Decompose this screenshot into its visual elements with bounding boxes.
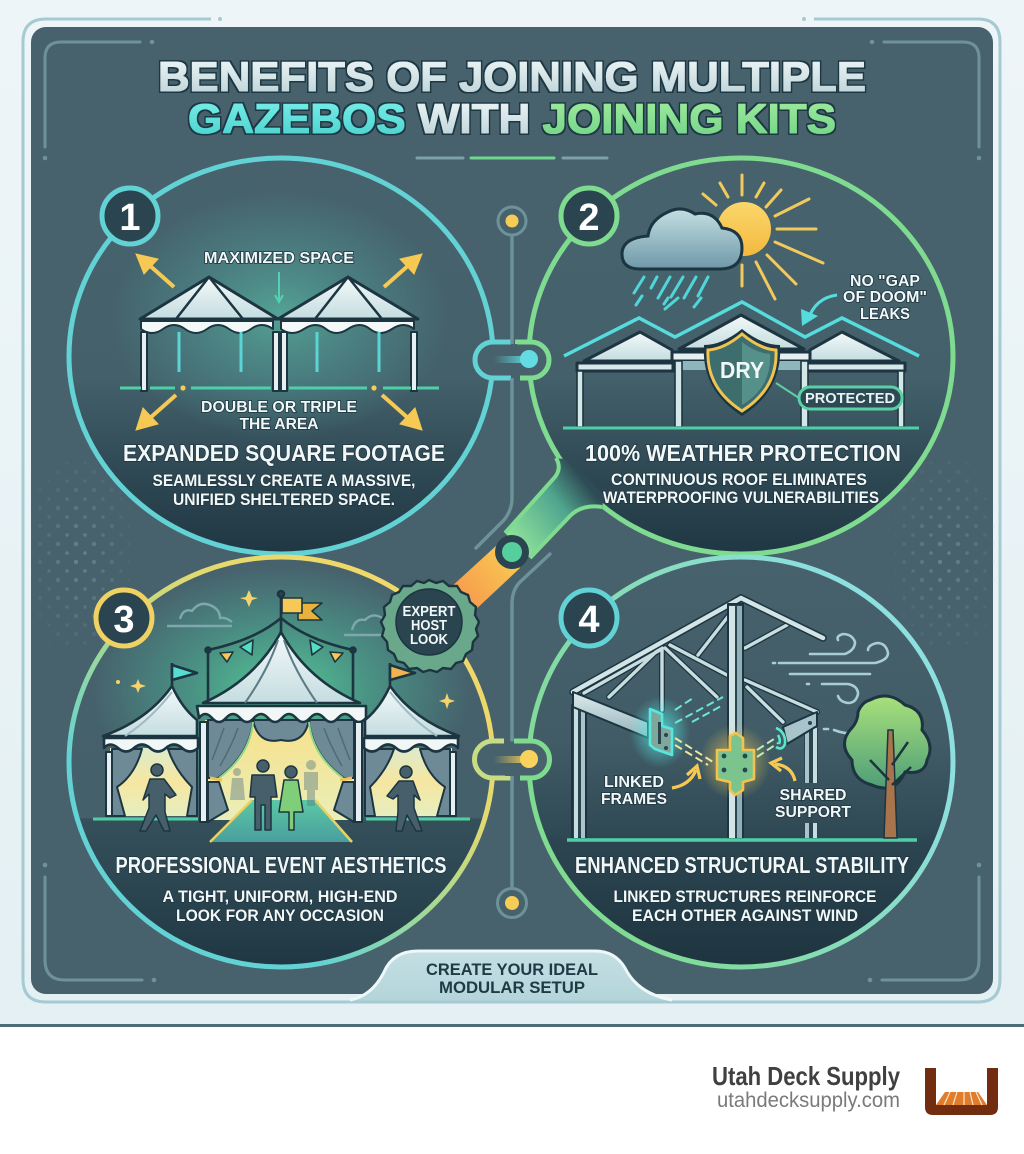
call to action tab: CREATE YOUR IDEAL	[426, 961, 598, 979]
panel 1: expanded square footage	[69, 158, 493, 554]
ground	[93, 818, 470, 820]
footer band	[0, 1024, 1024, 1154]
footer brand text: Utah Deck Supply	[712, 1061, 900, 1091]
connector capsule lower	[474, 736, 550, 782]
label: linked frames	[601, 774, 667, 808]
callout: protected: PROTECTED	[805, 391, 895, 407]
panel 4: structural stability	[529, 557, 953, 967]
call to action tab	[350, 951, 672, 1000]
badge 1	[102, 188, 158, 244]
badge 4: 4	[578, 599, 600, 641]
arrow: down to joint	[275, 272, 283, 302]
badge 2	[561, 188, 617, 244]
right post	[804, 728, 818, 838]
description 3: A TIGHT, UNIFORM, HIGH-END	[162, 888, 398, 906]
footer brand text	[712, 1061, 900, 1112]
connector node bottom	[498, 888, 526, 918]
description 1: SEAMLESSLY CREATE A MASSIVE,	[152, 472, 416, 490]
title: BENEFITS OF JOINING MULTIPLE	[158, 53, 866, 100]
left post	[572, 705, 586, 838]
left tent	[103, 663, 198, 816]
connector capsule upper	[475, 340, 549, 382]
icon: sun	[703, 175, 823, 299]
connector node top	[498, 207, 526, 235]
badge 4	[561, 590, 617, 646]
panel 2: weather protection	[529, 158, 953, 554]
yellow expansion arrows	[136, 254, 422, 430]
badge: expert host look: LOOK	[410, 632, 448, 648]
pennants	[220, 640, 343, 662]
description 1	[152, 472, 416, 509]
connector dashes	[675, 697, 778, 765]
continuous cyan roofline	[564, 302, 919, 356]
label: shared support	[775, 787, 852, 821]
badge 1: 1	[119, 197, 141, 239]
clouds and sparkles	[116, 590, 455, 709]
icon: tree	[844, 696, 930, 838]
call to action tab: MODULAR SETUP	[439, 979, 585, 997]
icon: shared support bracket	[717, 733, 754, 795]
cyan curtain rails	[179, 332, 379, 372]
ground line	[563, 426, 919, 430]
badge 3: 3	[113, 599, 135, 641]
label: shared support: SHARED	[780, 787, 846, 804]
center tent	[197, 591, 366, 822]
icon: wind	[773, 634, 888, 734]
badge: expert host look: HOST	[411, 618, 447, 634]
panel 3: professional event aesthetics	[69, 557, 493, 967]
title	[158, 53, 866, 142]
badge 3	[96, 590, 152, 646]
label: maximized space: MAXIMIZED SPACE	[204, 250, 354, 267]
main panel	[31, 27, 993, 994]
heading 2: 100% WEATHER PROTECTION	[585, 440, 901, 466]
diagonal joint band	[450, 458, 604, 613]
footer logo	[925, 1068, 998, 1115]
label: shared support: SUPPORT	[775, 804, 852, 821]
description 3: LOOK FOR ANY OCCASION	[176, 907, 384, 925]
heading 1: EXPANDED SQUARE FOOTAGE	[123, 440, 445, 466]
callout: no gap of doom leaks	[801, 273, 927, 326]
description 3	[162, 888, 398, 925]
heading 4: ENHANCED STRUCTURAL STABILITY	[575, 852, 909, 878]
center pole	[728, 604, 743, 838]
ground line	[567, 838, 917, 842]
curtains	[208, 720, 253, 778]
icon: shield DRY	[704, 329, 780, 416]
icon: rain cloud	[622, 209, 742, 309]
callout: no gap of doom leaks: OF DOOM"	[843, 289, 927, 306]
callout: no gap of doom leaks: NO "GAP	[850, 273, 920, 290]
badge: expert host look: EXPERT	[402, 604, 456, 620]
badge 2: 2	[578, 197, 600, 239]
walkway	[210, 800, 352, 842]
frame structure	[573, 598, 823, 722]
glow brackets	[630, 696, 690, 768]
title divider	[417, 156, 607, 160]
arrow: shared support	[771, 758, 795, 781]
label: linked frames: LINKED	[604, 774, 664, 791]
label: double or triple the area: THE AREA	[240, 416, 318, 433]
ground line	[120, 386, 439, 390]
footer brand text: utahdecksupply.com	[717, 1089, 900, 1112]
description 2: CONTINUOUS ROOF ELIMINATES	[611, 471, 867, 489]
heading 3: PROFESSIONAL EVENT AESTHETICS	[116, 852, 446, 878]
callout: no gap of doom leaks: LEAKS	[860, 306, 910, 323]
label: double or triple the area	[201, 399, 357, 433]
badge: expert host look	[381, 580, 479, 672]
tents: continuous roof	[577, 315, 905, 427]
label: double or triple the area: DOUBLE OR TRIPLE	[201, 399, 357, 416]
people	[140, 760, 422, 831]
tents: joined gazebos	[140, 277, 418, 391]
connector spine	[476, 232, 550, 888]
label: linked frames: FRAMES	[601, 791, 667, 808]
description 2	[603, 471, 879, 507]
description 4: LINKED STRUCTURES REINFORCE	[614, 888, 876, 906]
callout: protected	[776, 383, 902, 409]
icon: shield DRY: DRY	[720, 357, 764, 383]
description 1: UNIFIED SHELTERED SPACE.	[173, 491, 395, 509]
title: GAZEBOS WITH JOINING KITS	[188, 95, 836, 142]
description 4	[614, 888, 876, 925]
right beam	[783, 712, 817, 744]
icon: linked bracket	[650, 709, 672, 755]
left beam	[573, 692, 648, 738]
arrow: linked frames	[672, 766, 700, 788]
description 2: WATERPROOFING VULNERABILITIES	[603, 489, 879, 507]
right fitting	[776, 728, 785, 748]
right tent	[364, 663, 459, 816]
description 4: EACH OTHER AGAINST WIND	[632, 907, 858, 925]
